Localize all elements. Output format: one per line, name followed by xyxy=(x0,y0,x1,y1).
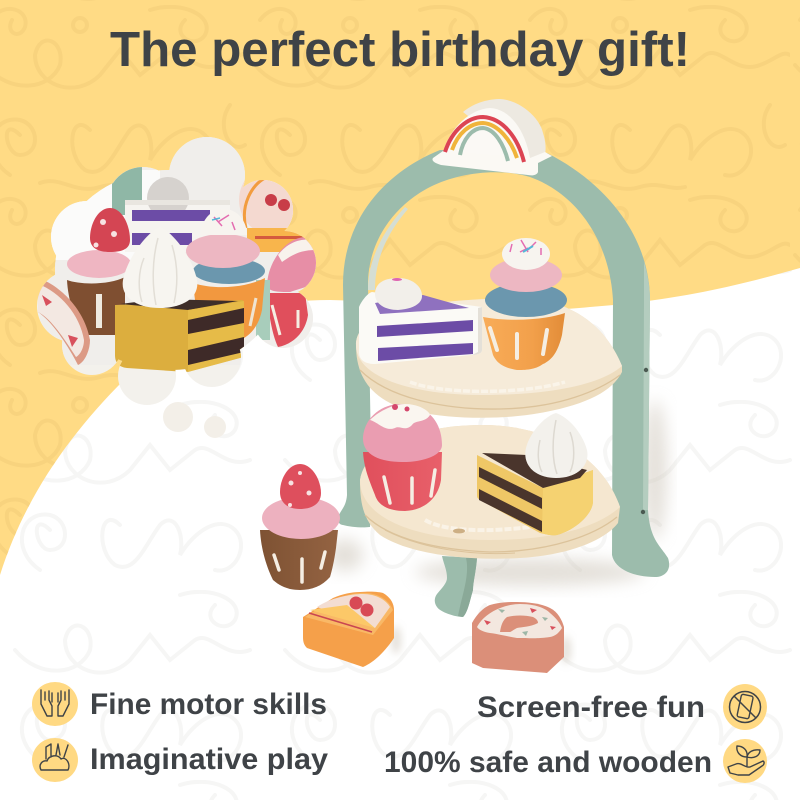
label: Imaginative play xyxy=(90,743,328,776)
background: yellow wave with squiggles xyxy=(0,0,800,575)
brown cupcake with strawberry xyxy=(260,464,340,590)
back orange slice xyxy=(239,180,293,228)
label: Fine motor skills xyxy=(90,688,327,721)
benefit: screen-free fun xyxy=(477,684,767,730)
icon: plant in hand xyxy=(723,739,767,783)
center back foot xyxy=(435,556,477,617)
thought bubble with zoomed photo xyxy=(0,130,340,438)
bubble trail dots xyxy=(163,402,226,438)
benefit: 100% safe and wooden xyxy=(384,739,767,783)
right red base xyxy=(267,293,308,347)
label: Screen-free fun xyxy=(477,691,705,724)
sprinkle ball xyxy=(502,238,550,270)
blue ring xyxy=(194,261,265,284)
topping ball xyxy=(375,278,422,310)
bubble photo content xyxy=(37,137,316,405)
sprinkle ball xyxy=(204,214,246,235)
orange cupcake xyxy=(193,278,265,343)
back purple cake xyxy=(125,205,160,252)
rainbow arcs xyxy=(445,117,524,162)
rainbow topper xyxy=(432,99,552,175)
chocolate layer cake slice xyxy=(477,413,593,535)
blue ring xyxy=(485,283,567,317)
mint sliver xyxy=(256,280,270,340)
pink and red cupcake xyxy=(363,404,442,511)
orange cupcake with rings xyxy=(483,238,567,370)
icon: art tools and cloud xyxy=(32,738,78,782)
pink ring xyxy=(490,258,562,292)
left pink ring xyxy=(67,250,131,278)
purple layer cake slice xyxy=(359,278,482,364)
icon: crossed-out phone xyxy=(723,684,767,730)
lower wooden plate xyxy=(360,425,620,559)
left strawberry xyxy=(90,208,130,252)
benefit: imaginative play xyxy=(32,738,328,782)
title: The perfect birthday gift! xyxy=(110,23,690,77)
orange swiss roll slice xyxy=(303,592,394,667)
pink ring xyxy=(186,234,260,268)
mint arch stand xyxy=(338,150,669,577)
left brown cupcake xyxy=(67,277,125,335)
right pink dome xyxy=(267,237,316,292)
front yellow cake xyxy=(115,300,243,372)
soft shadows under toy xyxy=(327,400,667,664)
pink ring xyxy=(262,497,340,539)
benefit: fine motor skills xyxy=(32,682,327,726)
meringue xyxy=(525,413,587,478)
upper wooden plate xyxy=(356,297,622,418)
pink roll slice xyxy=(472,602,564,673)
meringue xyxy=(123,227,197,308)
left roll slice xyxy=(38,278,90,365)
strawberry xyxy=(280,464,321,509)
label: 100% safe and wooden xyxy=(384,746,712,779)
icon: hands xyxy=(32,682,78,726)
